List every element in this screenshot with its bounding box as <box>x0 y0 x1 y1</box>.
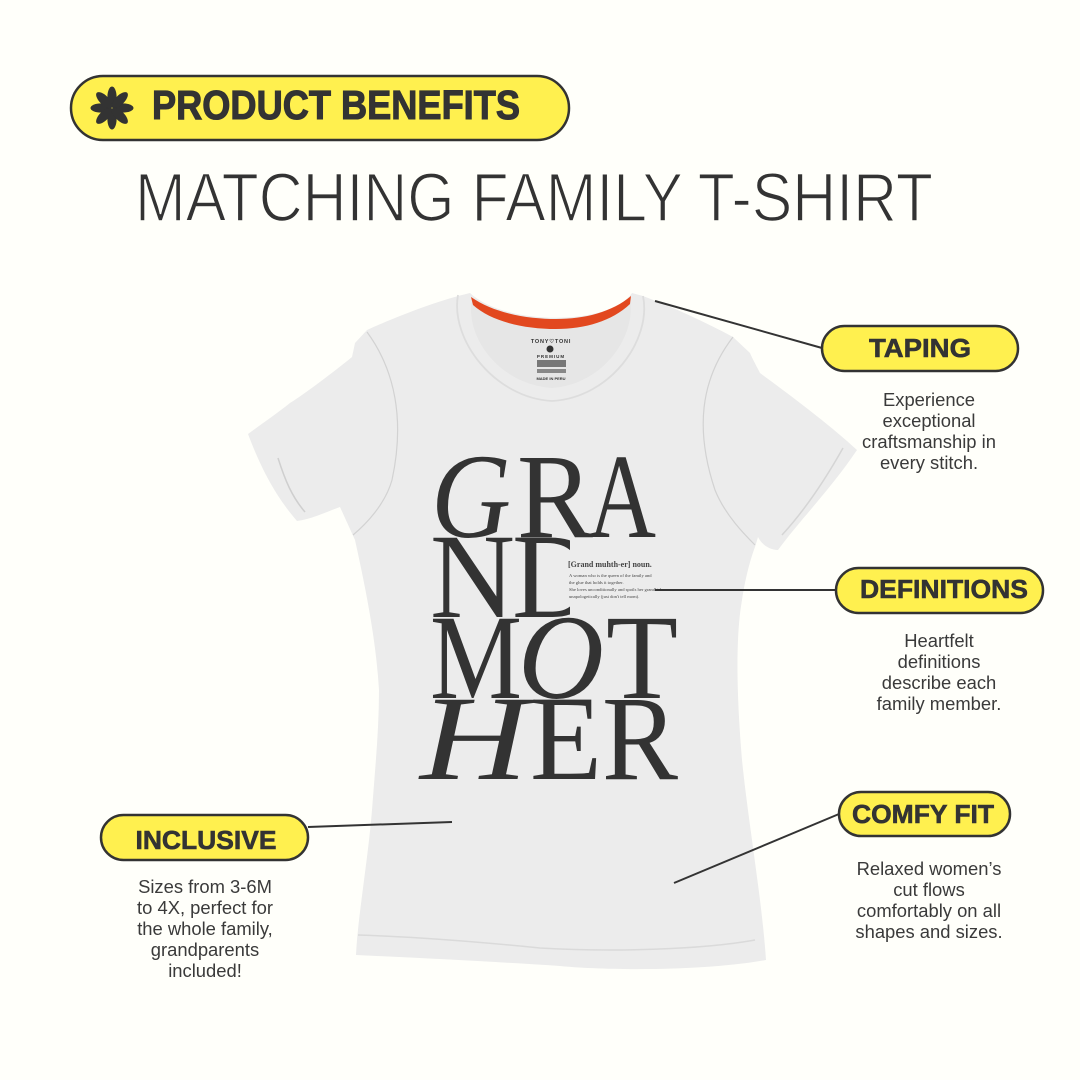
graphic: grandmother typography: A <box>588 430 656 564</box>
neck label: TONY♡TONI <box>531 338 571 345</box>
callout: definitions: definitions <box>898 651 980 672</box>
graphic: grandmother typography: T <box>606 591 678 725</box>
callout: taping: exceptional <box>882 410 976 431</box>
graphic: grandmother typography: G <box>431 430 511 564</box>
callout: inclusive: INCLUSIVE <box>136 825 276 855</box>
definition text <box>568 560 663 599</box>
callout: taping: every stitch. <box>880 452 978 473</box>
orange collar tape <box>471 296 631 329</box>
callout: definitions: Heartfelt <box>904 630 974 651</box>
graphic: grandmother typography: H <box>418 672 535 806</box>
neck label: MADE IN PERU <box>536 376 566 381</box>
graphic: grandmother typography: E <box>530 672 602 806</box>
graphic: grandmother typography: O <box>518 591 604 725</box>
neck label <box>531 338 571 381</box>
sleeve hems <box>278 458 305 512</box>
graphic: grandmother typography <box>418 456 678 780</box>
callout: inclusive: included! <box>168 960 242 981</box>
badge: product benefits: PRODUCT BENEFITS <box>152 82 520 128</box>
callout: definitions: family member. <box>877 693 1001 714</box>
definition text: She loves unconditionally and spoils her grandkids <box>569 587 663 592</box>
bottom hem <box>358 935 755 950</box>
icon: flower <box>90 86 134 130</box>
graphic: grandmother typography: M <box>430 591 522 725</box>
graphic: grandmother typography: D <box>512 510 597 644</box>
title: MATCHING FAMILY T-SHIRT <box>135 159 933 236</box>
callout: definitions: DEFINITIONS <box>860 574 1028 604</box>
callout: inclusive: grandparents <box>151 939 259 960</box>
callout: inclusive: to 4X, perfect for <box>137 897 273 918</box>
right armhole seam <box>703 337 755 545</box>
callout: inclusive: the whole family, <box>137 918 273 939</box>
definition text: A woman who is the queen of the family and <box>569 573 652 578</box>
neck inside <box>471 300 631 388</box>
definition text: unapologetically (just don't tell mom). <box>569 594 639 599</box>
callout: taping: Experience <box>883 389 975 410</box>
graphic: grandmother typography: N <box>430 510 515 644</box>
callout: taping: craftsmanship in <box>862 431 996 452</box>
callout: definitions: describe each <box>882 672 996 693</box>
graphic: grandmother typography: R <box>517 430 593 564</box>
left armhole seam <box>353 332 398 535</box>
t-shirt <box>248 293 857 969</box>
graphic: grandmother typography: R <box>602 672 678 806</box>
callout: definitions <box>655 568 1043 714</box>
callout: comfy fit: COMFY FIT <box>852 799 994 829</box>
neck label: PREMIUM <box>537 354 565 359</box>
callout: taping <box>655 301 1018 473</box>
definition text: the glue that holds it together. <box>569 580 624 585</box>
callout: inclusive: Sizes from 3-6M <box>138 876 272 897</box>
callout: taping: TAPING <box>869 333 971 363</box>
callout: comfy fit: shapes and sizes. <box>855 921 1003 942</box>
badge: product benefits <box>71 76 569 140</box>
callout: comfy fit <box>674 792 1010 942</box>
shirt body <box>248 293 857 969</box>
callout: comfy fit: comfortably on all <box>857 900 1001 921</box>
collar rib <box>457 295 644 401</box>
callout: inclusive <box>101 815 452 981</box>
definition text: [Grand muhth-er] noun. <box>568 560 652 569</box>
callout: comfy fit: cut flows <box>893 879 965 900</box>
callout: comfy fit: Relaxed women’s <box>857 858 1001 879</box>
